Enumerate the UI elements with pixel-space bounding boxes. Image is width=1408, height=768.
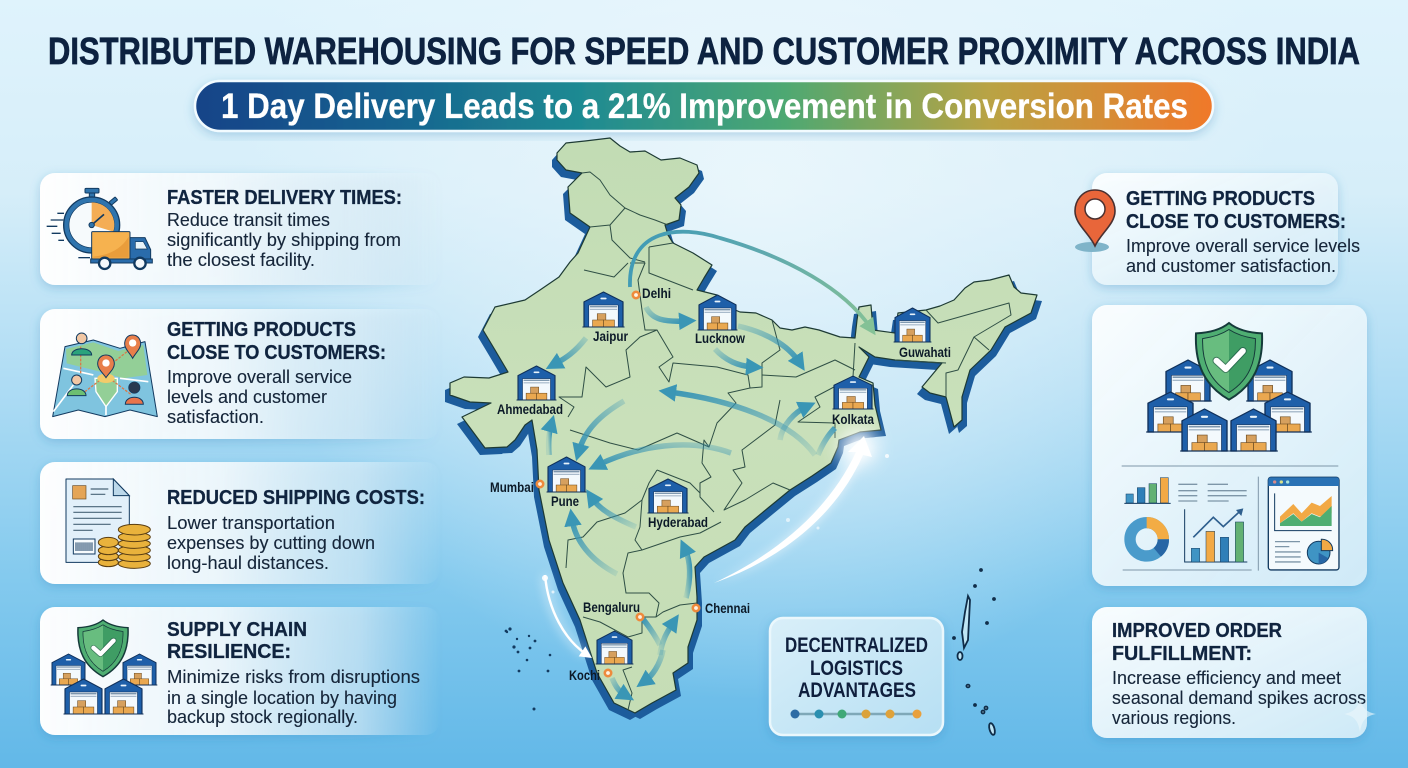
body text: significantly by shipping from xyxy=(167,230,401,250)
body text: in a single location by having xyxy=(167,688,397,708)
warehouse: Guwahati xyxy=(894,308,931,342)
body text: Lower transportation xyxy=(167,513,335,533)
icon: invoice and coins xyxy=(66,479,150,568)
warehouse: Jaipur xyxy=(582,292,625,327)
islands: lakshadweep xyxy=(505,627,551,710)
body text: Improve overall service xyxy=(167,367,352,387)
heading: SUPPLY CHAIN xyxy=(167,619,307,641)
body text: Increase efficiency and meet xyxy=(1112,668,1341,688)
city labels: Hyderabad xyxy=(648,515,708,530)
icon: map with customers and pins xyxy=(53,333,157,417)
warehouse: Lucknow xyxy=(698,295,737,330)
city labels: Kochi xyxy=(569,668,600,683)
body text xyxy=(1126,236,1360,276)
heading: RESILIENCE: xyxy=(167,641,291,663)
panel: supply chain resilience xyxy=(40,607,440,735)
body text: and customer satisfaction. xyxy=(1126,256,1336,276)
heading: FULFILLMENT: xyxy=(1112,643,1252,665)
icon: shield with warehouse network xyxy=(1146,323,1312,451)
glowing arrows xyxy=(542,427,889,654)
body text xyxy=(167,367,352,427)
heading: GETTING PRODUCTS xyxy=(167,319,356,341)
body text: the closest facility. xyxy=(167,250,315,270)
route arrows xyxy=(549,232,870,695)
panel: getting products close to customers (right) xyxy=(1075,173,1360,285)
callout: decentralized logistics advantages xyxy=(770,618,943,735)
body text: backup stock regionally. xyxy=(167,707,358,727)
city labels: Chennai xyxy=(705,601,750,616)
panel: faster delivery times xyxy=(40,173,440,285)
heading: CLOSE TO CUSTOMERS: xyxy=(1126,211,1346,233)
heading: GETTING PRODUCTS xyxy=(1126,188,1315,210)
icon: location pin xyxy=(1075,190,1115,252)
map land xyxy=(445,138,1042,720)
heading xyxy=(1126,188,1346,233)
city labels: Pune xyxy=(551,494,579,509)
warehouse: Kochi xyxy=(596,631,633,664)
warehouse: Kolkata xyxy=(832,376,874,409)
city labels: Lucknow xyxy=(695,331,745,346)
body text: satisfaction. xyxy=(167,407,264,427)
icon: shield and warehouses xyxy=(51,620,157,714)
callout: decentralized logistics advantages: LOGISTICS xyxy=(810,657,903,680)
heading xyxy=(167,319,386,364)
callout: decentralized logistics advantages: DECENTRALIZED xyxy=(785,634,928,657)
body text: various regions. xyxy=(1112,708,1236,728)
subtitle banner: 1 Day Delivery Leads to a 21% Improvement in Conversion Rates xyxy=(221,87,1188,126)
panel: reduced shipping costs xyxy=(40,462,440,584)
body text: Improve overall service levels xyxy=(1126,236,1360,256)
body text xyxy=(167,667,420,727)
heading: IMPROVED ORDER xyxy=(1112,620,1283,642)
city labels xyxy=(490,286,951,683)
heading xyxy=(1112,620,1283,665)
heading: FASTER DELIVERY TIMES: xyxy=(167,187,402,209)
body text: levels and customer xyxy=(167,387,327,407)
city labels: Kolkata xyxy=(832,412,874,427)
city labels: Jaipur xyxy=(593,329,629,344)
progress dots xyxy=(790,710,922,718)
icon: stopwatch and truck xyxy=(47,188,152,269)
heading xyxy=(167,619,307,663)
body text: seasonal demand spikes across xyxy=(1112,688,1366,708)
islands: andaman and nicobar xyxy=(953,569,996,735)
body text xyxy=(167,513,375,573)
location markers xyxy=(537,292,699,676)
sparkle mark xyxy=(1344,698,1376,732)
city labels: Ahmedabad xyxy=(497,402,563,417)
body text: Minimize risks from disruptions xyxy=(167,667,420,687)
callout: decentralized logistics advantages: ADVANTAGES xyxy=(798,679,916,702)
body text xyxy=(1112,668,1366,728)
warehouse: Hyderabad xyxy=(647,479,689,513)
city labels: Mumbai xyxy=(490,480,534,495)
city labels: Delhi xyxy=(642,286,671,301)
city labels: Guwahati xyxy=(899,345,951,360)
india map xyxy=(445,138,1042,735)
heading: REDUCED SHIPPING COSTS: xyxy=(167,487,425,509)
city labels: Bengaluru xyxy=(583,600,640,615)
panel: warehouses and analytics xyxy=(1092,305,1367,586)
heading: CLOSE TO CUSTOMERS: xyxy=(167,342,386,364)
body text xyxy=(167,210,401,270)
panel: improved order fulfillment xyxy=(1092,607,1367,738)
body text: Reduce transit times xyxy=(167,210,330,230)
body text: expenses by cutting down xyxy=(167,533,375,553)
panel: getting products close to customers (left) xyxy=(40,309,440,439)
warehouse: Ahmedabad xyxy=(517,366,556,400)
body text: long-haul distances. xyxy=(167,553,329,573)
chart icons: bars, donut, trend and dashboard xyxy=(1122,466,1339,571)
warehouse: Pune xyxy=(547,457,586,492)
